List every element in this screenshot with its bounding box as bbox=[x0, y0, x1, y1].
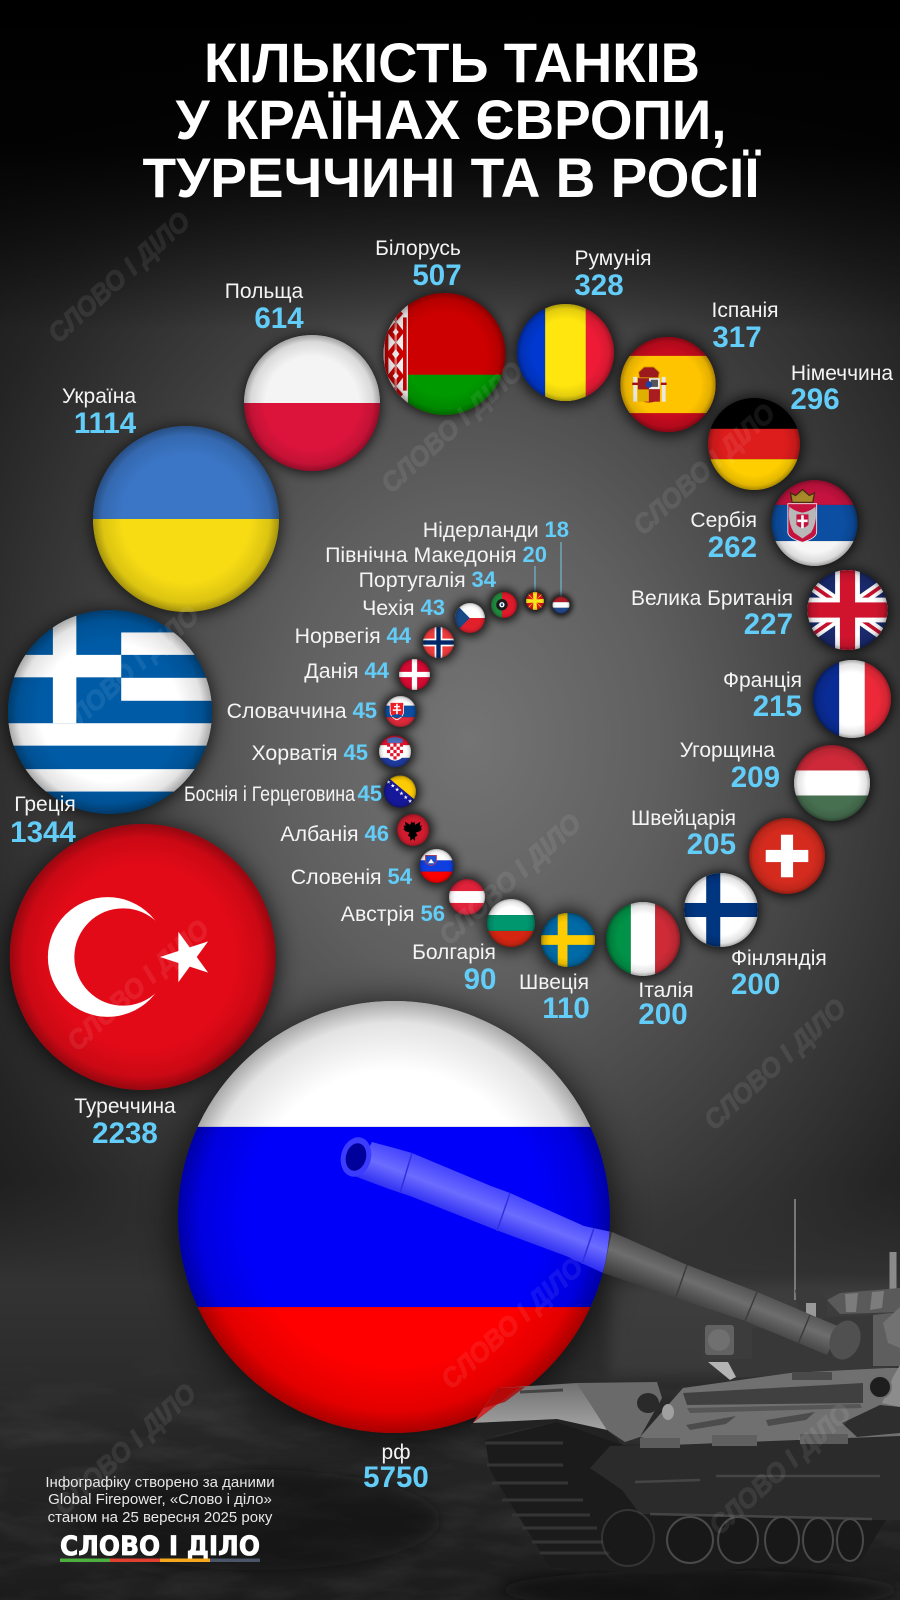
label: Albania: Албанія 46 bbox=[280, 821, 389, 846]
turret bbox=[702, 1288, 900, 1380]
bubble: North Macedonia bbox=[523, 589, 547, 613]
watermarks: СЛОВО І ДІЛО bbox=[433, 808, 587, 951]
title: У КРАЇНАХ ЄВРОПИ, bbox=[176, 88, 726, 151]
watermarks: СЛОВО І ДІЛО bbox=[703, 1398, 857, 1541]
bubble: Croatia bbox=[375, 732, 415, 771]
bubble: Sweden bbox=[538, 910, 598, 971]
label: Ukraine: 1114 bbox=[74, 407, 137, 440]
bubble: Austria bbox=[446, 876, 488, 919]
label: Spain: 317 bbox=[712, 321, 762, 354]
label: Poland: Польща bbox=[225, 280, 304, 303]
label: Finland bbox=[731, 947, 827, 1001]
source note: станом на 25 вересня 2025 року bbox=[48, 1509, 273, 1526]
label: Serbia: Сербія bbox=[690, 509, 757, 532]
bubble: Serbia bbox=[770, 479, 859, 569]
label: France bbox=[723, 669, 802, 723]
gun base bbox=[603, 1232, 866, 1364]
bubble: Germany bbox=[706, 397, 802, 493]
label: Belarus bbox=[375, 237, 462, 292]
title bbox=[142, 31, 761, 209]
bubble: Bulgaria bbox=[484, 897, 538, 950]
label: Austria: Австрія 56 bbox=[341, 901, 445, 926]
watermarks bbox=[42, 206, 857, 1541]
title: ТУРЕЧЧИНІ ТА В РОСІЇ bbox=[142, 146, 761, 209]
label: Spain: Іспанія bbox=[711, 299, 779, 322]
watermarks: СЛОВО І ДІЛО bbox=[375, 356, 529, 499]
bubble: Finland bbox=[683, 872, 759, 949]
label: Russia: рф bbox=[382, 1441, 410, 1464]
label: Switzerland: 205 bbox=[687, 828, 736, 861]
label: Germany bbox=[790, 362, 893, 416]
bubble: France bbox=[811, 659, 893, 740]
bubble: Portugal bbox=[488, 589, 520, 622]
bubble: United Kingdom bbox=[806, 569, 889, 652]
label: Slovenia: Словенія 54 bbox=[291, 864, 413, 889]
tank barrel over flag bbox=[340, 1137, 610, 1273]
bubble: Czechia bbox=[452, 600, 488, 637]
label: Finland: 200 bbox=[731, 968, 780, 1001]
label: Romania: 328 bbox=[574, 269, 624, 302]
label: Czechia: Чехія 43 bbox=[362, 595, 445, 620]
label: Finland: Фінляндія bbox=[731, 947, 827, 970]
bubble: Greece bbox=[8, 610, 213, 816]
watermarks: СЛОВО І ДІЛО bbox=[698, 993, 852, 1136]
label: Turkey: 2238 bbox=[92, 1117, 158, 1150]
label: Sweden bbox=[519, 971, 590, 1025]
title: КІЛЬКІСТЬ ТАНКІВ bbox=[204, 31, 700, 94]
label: United Kingdom bbox=[631, 587, 793, 641]
label: Switzerland bbox=[631, 807, 736, 861]
leader lines bbox=[535, 542, 561, 598]
label: Bulgaria: Болгарія bbox=[412, 941, 496, 964]
bubble: Slovenia bbox=[416, 846, 457, 886]
bubble: Russia bbox=[178, 1001, 610, 1437]
label: Norway: Норвегія 44 bbox=[295, 623, 412, 648]
label: France: 215 bbox=[753, 690, 802, 723]
label: Bosnia and Herzegovina: Боснія і Герцеговина bbox=[184, 783, 355, 806]
label: Hungary: Угорщина bbox=[680, 739, 775, 762]
label: Romania: Румунія bbox=[574, 247, 652, 270]
tank barrel outside flag bbox=[354, 1142, 840, 1355]
tank bbox=[470, 1199, 900, 1574]
label: Greece: Греція bbox=[14, 793, 76, 816]
label: Hungary: 209 bbox=[731, 761, 780, 794]
label: Germany: 296 bbox=[790, 383, 840, 416]
label: United Kingdom: 227 bbox=[744, 608, 793, 641]
label: Serbia bbox=[690, 509, 757, 564]
bubble: Belarus bbox=[384, 293, 506, 416]
label: Bosnia and Herzegovina: 45 bbox=[358, 781, 382, 806]
watermarks: СЛОВО І ДІЛО bbox=[48, 1378, 202, 1521]
label: Bulgaria bbox=[412, 941, 496, 996]
watermarks: СЛОВО І ДІЛО bbox=[51, 600, 205, 743]
watermarks: СЛОВО І ДІЛО bbox=[627, 398, 781, 541]
label: Italy: Італія bbox=[638, 979, 694, 1002]
bubble: Turkey bbox=[10, 824, 276, 1093]
logo: СЛОВО І ДІЛО bbox=[60, 1531, 260, 1562]
bubble: Netherlands bbox=[550, 594, 572, 617]
label: Russia bbox=[363, 1441, 429, 1494]
label: Poland bbox=[225, 280, 304, 335]
label: Belarus: 507 bbox=[412, 259, 462, 292]
bubble: Denmark bbox=[396, 656, 433, 694]
watermarks: СЛОВО І ДІЛО bbox=[61, 914, 215, 1057]
label: Italy bbox=[638, 979, 694, 1031]
label: Croatia: Хорватія 45 bbox=[251, 740, 368, 765]
label: Sweden: 110 bbox=[542, 992, 590, 1025]
label: Greece bbox=[10, 793, 76, 849]
label: North Macedonia: Північна Македонія 20 bbox=[325, 542, 547, 567]
bubble: Bosnia and Herzegovina bbox=[380, 772, 420, 811]
label: Switzerland: Швейцарія bbox=[631, 807, 736, 830]
label: Belarus: Білорусь bbox=[375, 237, 461, 260]
label: Sweden: Швеція bbox=[519, 971, 589, 994]
label: Germany: Німеччина bbox=[791, 362, 893, 385]
label: Serbia: 262 bbox=[708, 531, 757, 564]
antennas bbox=[795, 1199, 893, 1300]
label: Slovakia: Словаччина 45 bbox=[227, 698, 377, 723]
track and lower hull bbox=[485, 1422, 900, 1574]
watermarks: СЛОВО І ДІЛО bbox=[42, 206, 196, 349]
label: Italy: 200 bbox=[638, 998, 688, 1031]
label: Turkey bbox=[74, 1095, 176, 1150]
bubble: Norway bbox=[420, 624, 457, 662]
label: Bulgaria: 90 bbox=[464, 963, 496, 996]
bubble: Slovakia bbox=[382, 693, 419, 731]
bubble: Switzerland bbox=[747, 817, 827, 896]
label: Russia: 5750 bbox=[363, 1461, 429, 1494]
bubble: Italy bbox=[605, 901, 681, 978]
label: Poland: 614 bbox=[254, 302, 304, 335]
label: Turkey: Туреччина bbox=[74, 1095, 176, 1118]
label: Netherlands: Нідерланди 18 bbox=[423, 517, 569, 542]
bubble: Hungary bbox=[792, 744, 872, 823]
bubble: Albania bbox=[393, 811, 433, 850]
bubble: Spain bbox=[618, 336, 718, 435]
source note: Global Firepower, «Слово і діло» bbox=[48, 1491, 272, 1508]
label: Portugal: Португалія 34 bbox=[359, 567, 497, 592]
label: United Kingdom: Велика Британія bbox=[631, 587, 793, 610]
watermarks: СЛОВО І ДІЛО bbox=[435, 1252, 589, 1395]
bubble: Ukraine bbox=[93, 426, 279, 614]
bubble: Poland bbox=[244, 335, 380, 472]
label: Romania bbox=[574, 247, 652, 302]
label: Greece: 1344 bbox=[10, 816, 76, 849]
source note: Інфографіку створено за даними bbox=[45, 1474, 275, 1491]
label: Ukraine: Україна bbox=[62, 385, 136, 408]
label: Hungary bbox=[680, 739, 780, 794]
label: Ukraine bbox=[62, 385, 137, 440]
label: Spain bbox=[711, 299, 779, 354]
bubble: Romania bbox=[515, 303, 616, 404]
front plate bbox=[470, 1383, 623, 1445]
label: Denmark: Данія 44 bbox=[304, 658, 390, 683]
label: France: Франція bbox=[723, 669, 802, 692]
hull deck bbox=[577, 1365, 900, 1448]
source note bbox=[45, 1474, 275, 1526]
